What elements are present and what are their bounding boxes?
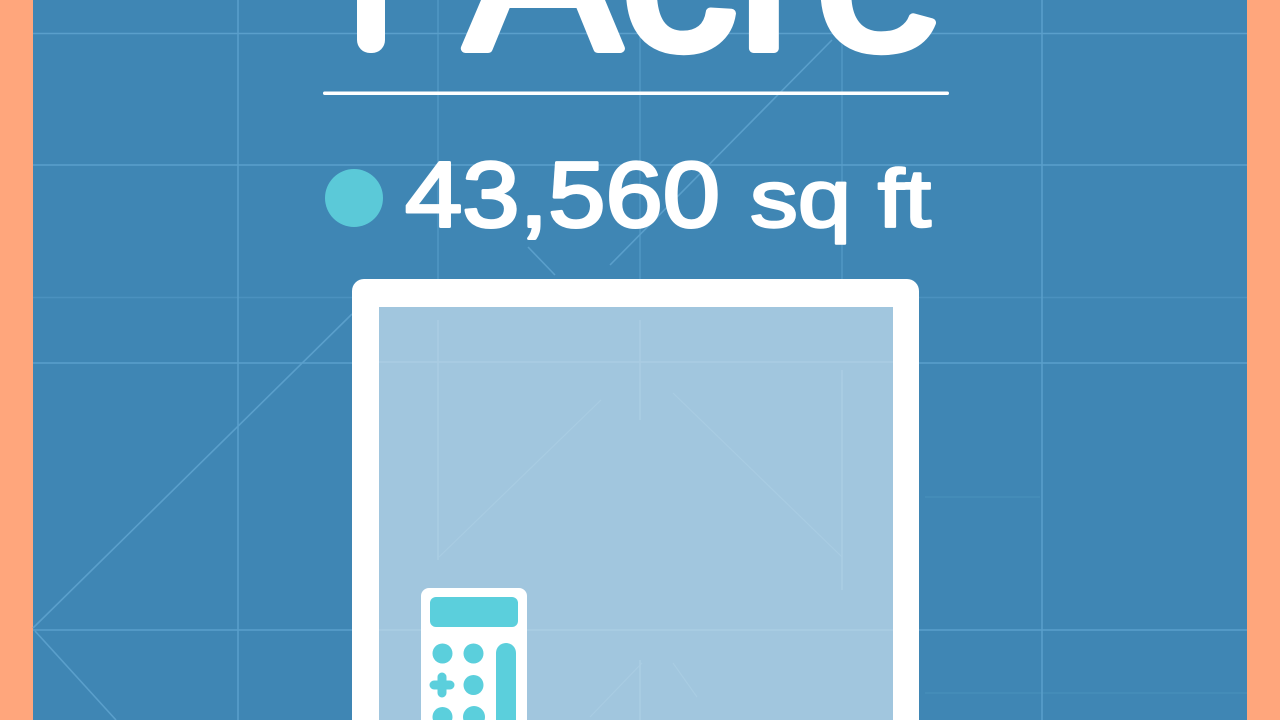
square fill xyxy=(379,307,893,720)
teal bullet dot xyxy=(325,169,383,227)
title xyxy=(357,0,936,56)
value unit: sq ft xyxy=(750,154,931,244)
calculator screen xyxy=(430,597,518,627)
title divider xyxy=(323,92,949,95)
value number: 43,560 xyxy=(405,142,720,246)
icon: calculator xyxy=(421,588,527,720)
square frame xyxy=(352,279,919,720)
acre square diagram xyxy=(352,279,919,720)
area value xyxy=(405,142,931,246)
calculator body xyxy=(421,588,527,720)
calculator keys xyxy=(432,643,516,720)
